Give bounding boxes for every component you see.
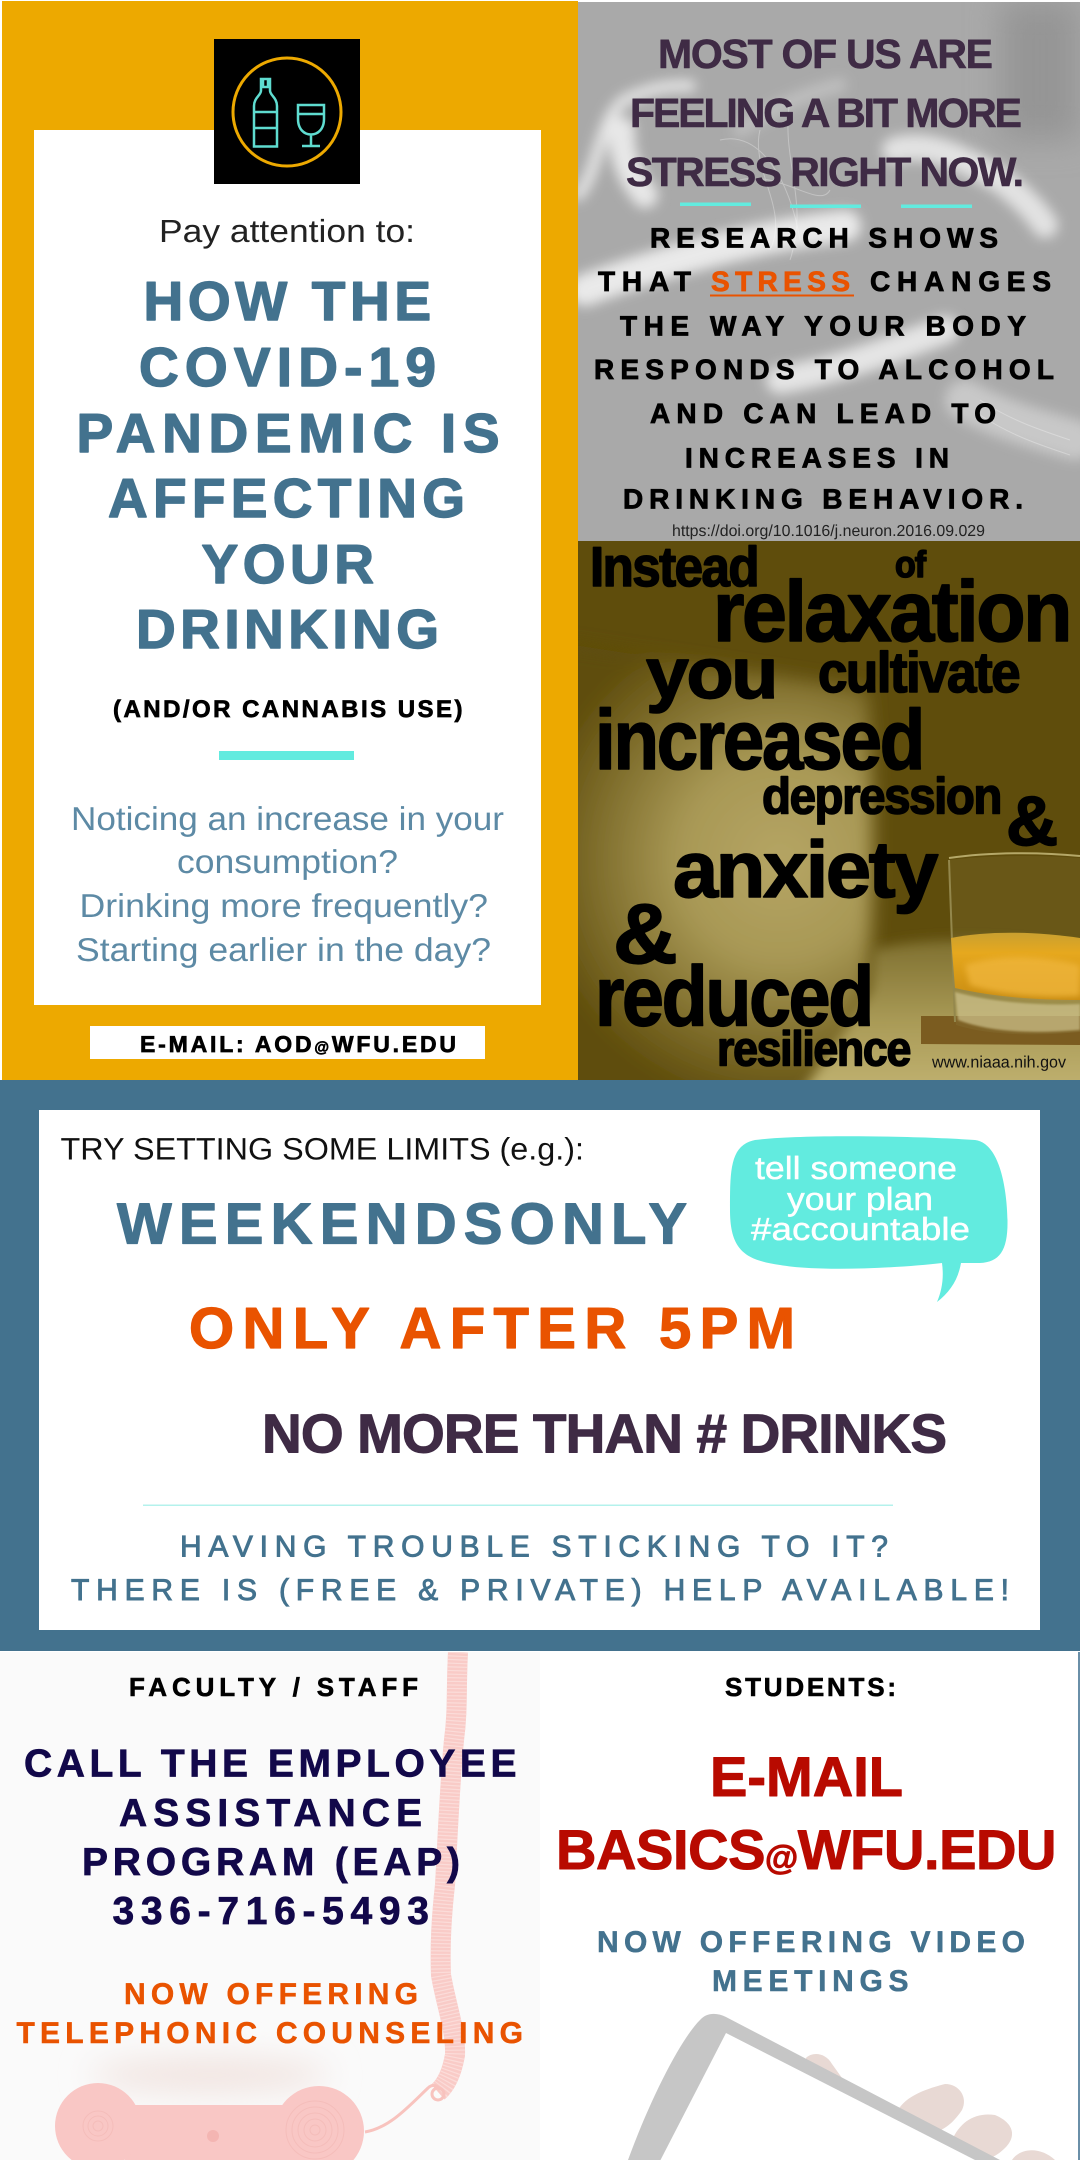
limit: only after 5pm: ONLY AFTER 5PM (189, 1296, 795, 1361)
text: call the employee assistance program (24, 1742, 516, 1933)
heading: how the covid-19 pandemic is affecting your drinking: PANDEMIC IS (76, 402, 500, 464)
panel: whisky word cloud panel (578, 541, 1080, 1080)
text: research shows stress changes response to alcohol: INCREASES IN (685, 442, 949, 474)
word cloud: instead of relaxation you cultivate increased depression and anxiety and reduced resilience: of (895, 544, 927, 585)
speech bubble: tell someone your plan: tell someone (755, 1150, 957, 1186)
heading: how the covid-19 pandemic is affecting your drinking: HOW THE (144, 270, 431, 332)
text: research shows stress changes response to alcohol: RESPONDS TO ALCOHOL (594, 354, 1054, 385)
image: whisky glass on a sofa (578, 661, 1080, 1080)
heading: most of us are feeling a bit more stress: FEELING A BIT MORE (630, 90, 1022, 136)
speech bubble: tell someone your plan: your plan (787, 1181, 933, 1217)
image: tablet held in a hand (628, 2014, 1055, 2160)
panel: stress photo panel (578, 0, 1080, 541)
image: hands in hair (578, 0, 1080, 455)
text: research shows stress changes response to alcohol: STRESS (711, 266, 850, 297)
heading: how the covid-19 pandemic is affecting your drinking: DRINKING (136, 598, 439, 660)
speech bubble: tell someone your plan (730, 1136, 1008, 1302)
heading: how the covid-19 pandemic is affecting your drinking (76, 270, 500, 660)
text: having trouble sticking to it (71, 1530, 1009, 1607)
word cloud: instead of relaxation you cultivate increased depression and anxiety and reduced resilience: increased (595, 693, 923, 788)
text: research shows stress changes response to alcohol: DRINKING BEHAVIOR. (623, 484, 1023, 514)
text: questions about consumption: Noticing an increase in your (71, 800, 504, 837)
heading: most of us are feeling a bit more stress: STRESS RIGHT NOW. (626, 149, 1024, 195)
text: having trouble sticking to it: HAVING TROUBLE STICKING TO IT? (180, 1530, 888, 1564)
word cloud: instead of relaxation you cultivate increased depression and anxiety and reduced resilience: cultivate (818, 641, 1019, 705)
text: call the employee assistance program: 336-716-5493 (112, 1890, 429, 1933)
text: pay attention to: Pay attention to: (159, 213, 415, 249)
citation: doi link: https://doi.org/10.1016/j.neuron.2016.09.029 (672, 523, 985, 540)
heading: how the covid-19 pandemic is affecting your drinking: AFFECTING (108, 467, 465, 529)
citation: niaaa website: www.niaaa.nih.gov (931, 1054, 1067, 1072)
callout: e-mail address bar: E-MAIL: AOD@WFU.EDU (140, 1031, 456, 1057)
text: now offering video meetings: NOW OFFERING VIDEO (597, 1926, 1025, 1959)
text: now offering telephonic counseling (16, 1978, 523, 2050)
heading: faculty / staff: FACULTY / STAFF (129, 1672, 418, 1702)
panel: white intro card (34, 130, 541, 1005)
text: e-mail basics address (556, 1745, 1056, 1881)
heading: students: STUDENTS: (725, 1672, 896, 1702)
text: e-mail basics address: E-MAIL (710, 1745, 903, 1808)
text: call the employee assistance program: ASSISTANCE (119, 1792, 422, 1835)
text: e-mail basics address: BASICS@WFU.EDU (556, 1818, 1056, 1881)
word cloud: instead of relaxation you cultivate increased depression and anxiety and reduced resilience: Instead (590, 535, 758, 598)
text: research shows stress changes response to alcohol: THAT (598, 266, 691, 297)
text: having trouble sticking to it: THERE IS (FREE & PRIVATE) HELP AVAILABLE! (71, 1574, 1009, 1607)
text: questions about consumption (71, 800, 504, 968)
word cloud: instead of relaxation you cultivate increased depression and anxiety and reduced resilience: reduced (595, 950, 872, 1044)
callout: e-mail address bar (90, 1026, 485, 1059)
text: questions about consumption: consumption? (177, 843, 398, 880)
text: and/or cannabis use: (AND/OR CANNABIS USE) (113, 696, 462, 723)
text: try setting some limits: TRY SETTING SOME LIMITS (e.g.): (60, 1132, 584, 1166)
panel: faculty and staff resources (0, 1652, 540, 2160)
word cloud: instead of relaxation you cultivate increased depression and anxiety and reduced resilience: depression (762, 768, 1001, 824)
text: now offering telephonic counseling: TELEPHONIC COUNSELING (16, 2017, 523, 2050)
text: now offering video meetings (597, 1926, 1025, 1998)
limit: no more than # drinks: NO MORE THAN # DRINKS (262, 1402, 947, 1464)
word cloud: instead of relaxation you cultivate increased depression and anxiety and reduced resilience: resilience (717, 1022, 910, 1076)
heading: most of us are feeling a bit more stress (626, 31, 1024, 195)
text: questions about consumption: Drinking more frequently? (80, 887, 488, 924)
text: call the employee assistance program: PROGRAM (EAP) (82, 1841, 460, 1884)
speech bubble: tell someone your plan: #accountable (751, 1211, 970, 1247)
text: now offering video meetings: MEETINGS (712, 1965, 908, 1998)
image: pink telephone handset and cord (55, 1652, 458, 2160)
accent bar (219, 751, 354, 760)
text: research shows stress changes response to alcohol (594, 222, 1054, 514)
underline: stress (710, 294, 854, 296)
word cloud: instead of relaxation you cultivate increased depression and anxiety and reduced resilience (590, 535, 1070, 1076)
text: call the employee assistance program: CALL THE EMPLOYEE (24, 1742, 516, 1786)
text: now offering telephonic counseling: NOW OFFERING (124, 1978, 418, 2011)
word cloud: instead of relaxation you cultivate increased depression and anxiety and reduced resilience: you (646, 634, 776, 714)
panel: student resources (559, 1678, 1055, 2160)
text: research shows stress changes response to alcohol: CHANGES (870, 266, 1051, 297)
heading: how the covid-19 pandemic is affecting your drinking: YOUR (202, 533, 374, 595)
text: research shows stress changes response to alcohol: RESEARCH SHOWS (650, 222, 998, 254)
text: research shows stress changes response to alcohol: THE WAY YOUR BODY (620, 310, 1026, 342)
word cloud: instead of relaxation you cultivate increased depression and anxiety and reduced resilience: & (613, 887, 675, 982)
word cloud: instead of relaxation you cultivate increased depression and anxiety and reduced resilience: anxiety (673, 825, 939, 914)
panel: gold intro panel (2, 1, 578, 1080)
text: research shows stress changes response to alcohol: AND CAN LEAD TO (650, 398, 996, 429)
icon: bottle and wine glass badge (214, 39, 360, 184)
limit: weekends only: WEEKENDSONLY (117, 1192, 687, 1256)
divider dashes (680, 202, 972, 208)
panel: white limits card (39, 1110, 1040, 1630)
text: questions about consumption: Starting earlier in the day? (76, 931, 491, 968)
heading: how the covid-19 pandemic is affecting your drinking: COVID-19 (139, 336, 436, 398)
panel: setting limits band (0, 1080, 1080, 1651)
word cloud: instead of relaxation you cultivate increased depression and anxiety and reduced resilience: & (1006, 782, 1057, 860)
heading: most of us are feeling a bit more stress: MOST OF US ARE (658, 31, 993, 77)
